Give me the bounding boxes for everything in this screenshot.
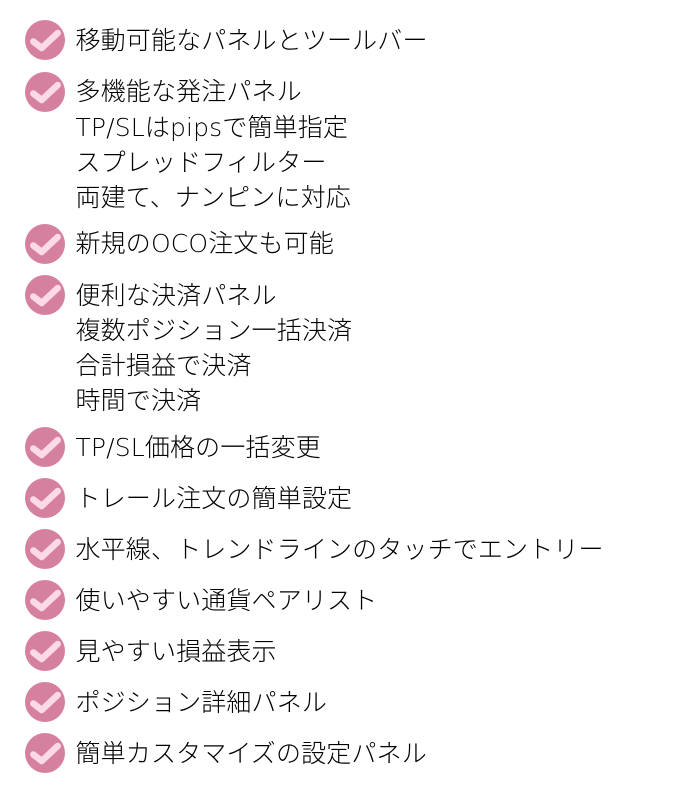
icon: check 2	[25, 72, 65, 112]
text: pair list: 使いやすい通貨ペアリスト	[76, 586, 377, 615]
icon: check 4	[25, 275, 65, 315]
text: time close: 時間で決済	[76, 386, 201, 414]
text: total PL close: 合計損益で決済	[76, 350, 252, 380]
icon: check 6	[25, 478, 65, 518]
text: spread filter: スプレッドフィルター	[76, 148, 327, 177]
text: bulk close: 複数ポジション一括決済	[76, 316, 352, 344]
text: TP/SL pips: TP/SLはpipsで簡単指定	[76, 113, 348, 142]
text: hedging: 両建て、ナンピンに対応	[76, 182, 351, 212]
icon: check 7	[25, 529, 65, 569]
icon: check 10	[25, 682, 65, 722]
text: trailing: トレール注文の簡単設定	[76, 484, 352, 513]
text: PL display: 見やすい損益表示	[76, 637, 277, 666]
icon: check 3	[25, 224, 65, 264]
text: movable panel: 移動可能なパネルとツールバー	[76, 26, 428, 54]
icon: check 9	[25, 631, 65, 671]
text: settings panel: 簡単カスタマイズの設定パネル	[76, 739, 427, 768]
icon: check 1	[25, 20, 65, 60]
text: order panel heading: 多機能な発注パネル	[76, 76, 302, 106]
icon: check 5	[25, 427, 65, 467]
text: TP/SL change: TP/SL価格の一括変更	[76, 432, 321, 462]
text: OCO: 新規のOCO注文も可能	[76, 229, 334, 258]
icon: check 11	[25, 733, 65, 773]
text: line touch entry: 水平線、トレンドラインのタッチでエントリー	[76, 535, 604, 564]
text: settlement panel heading: 便利な決済パネル	[76, 280, 277, 310]
icon: check 8	[25, 580, 65, 620]
text: position detail: ポジション詳細パネル	[76, 688, 327, 717]
